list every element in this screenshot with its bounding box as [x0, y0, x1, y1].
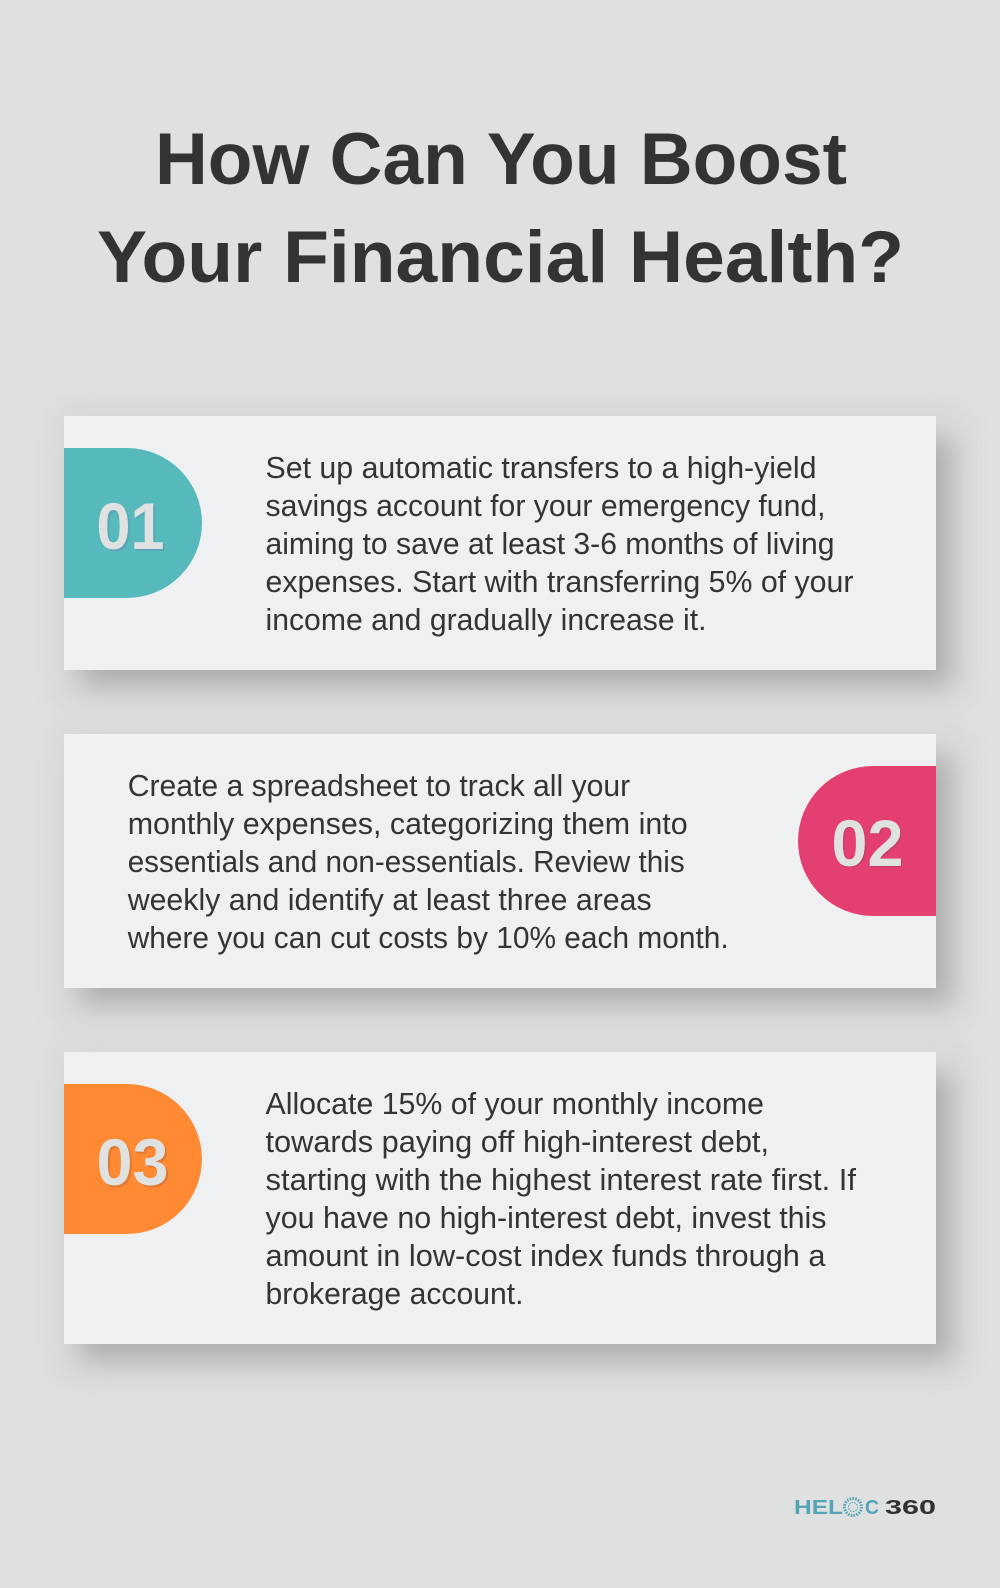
- text: step 02 description: weekly and identify at least three areas: [127, 882, 652, 917]
- text: step 02 description: [127, 768, 729, 955]
- text: step 03 description: brokerage account.: [266, 1276, 524, 1311]
- text: step 01 description: aiming to save at least 3-6 months of living: [266, 526, 834, 561]
- logo: HELOC360: [794, 1497, 936, 1519]
- logo: HELOC360: C: [865, 1497, 879, 1519]
- number badge 01: [64, 448, 202, 598]
- number badge 01: 01: [98, 491, 166, 565]
- number badge 03: 03: [98, 1127, 170, 1201]
- number badge 02: 02: [832, 807, 904, 881]
- text: step 03 description: amount in low-cost index funds through a: [266, 1238, 826, 1273]
- title: How Can You Boost: [155, 119, 847, 200]
- panel: step 03: [44, 1032, 976, 1390]
- logo: HELOC360: HEL: [794, 1497, 843, 1519]
- text: step 02 description: essentials and non-essentials. Review this: [128, 844, 685, 879]
- title: Your Financial Health?: [97, 217, 904, 298]
- icon: spiral ring: [844, 1498, 862, 1516]
- text: step 03 description: Allocate 15% of your monthly income: [266, 1086, 764, 1121]
- text: step 02 description: Create a spreadsheet to track all your: [128, 768, 630, 803]
- number badge 03: [64, 1084, 202, 1234]
- title: [97, 119, 904, 298]
- number badge 01: 01: [96, 489, 164, 563]
- text: step 01 description: income and gradually increase it.: [266, 602, 706, 637]
- panel: step 02: [44, 714, 976, 1034]
- text: step 01 description: expenses. Start with transferring 5% of your: [266, 564, 854, 599]
- logo: HELOC360: 360: [885, 1497, 936, 1519]
- number badge 03: 03: [96, 1125, 168, 1199]
- text: step 01 description: Set up automatic transfers to a high-yield: [266, 450, 816, 485]
- text: step 02 description: where you can cut costs by 10% each month.: [127, 920, 729, 955]
- text: step 02 description: monthly expenses, categorizing them into: [128, 806, 688, 841]
- text: step 03 description: starting with the highest interest rate first. If: [266, 1162, 856, 1197]
- panel: step 01: [44, 396, 976, 716]
- text: step 03 description: [266, 1086, 856, 1311]
- text: step 03 description: you have no high-interest debt, invest this: [266, 1200, 826, 1235]
- text: step 01 description: savings account for your emergency fund,: [266, 488, 826, 523]
- text: step 03 description: towards paying off high-interest debt,: [266, 1124, 769, 1159]
- number badge 02: [798, 766, 936, 916]
- text: step 01 description: [266, 450, 854, 637]
- number badge 02: 02: [832, 806, 904, 880]
